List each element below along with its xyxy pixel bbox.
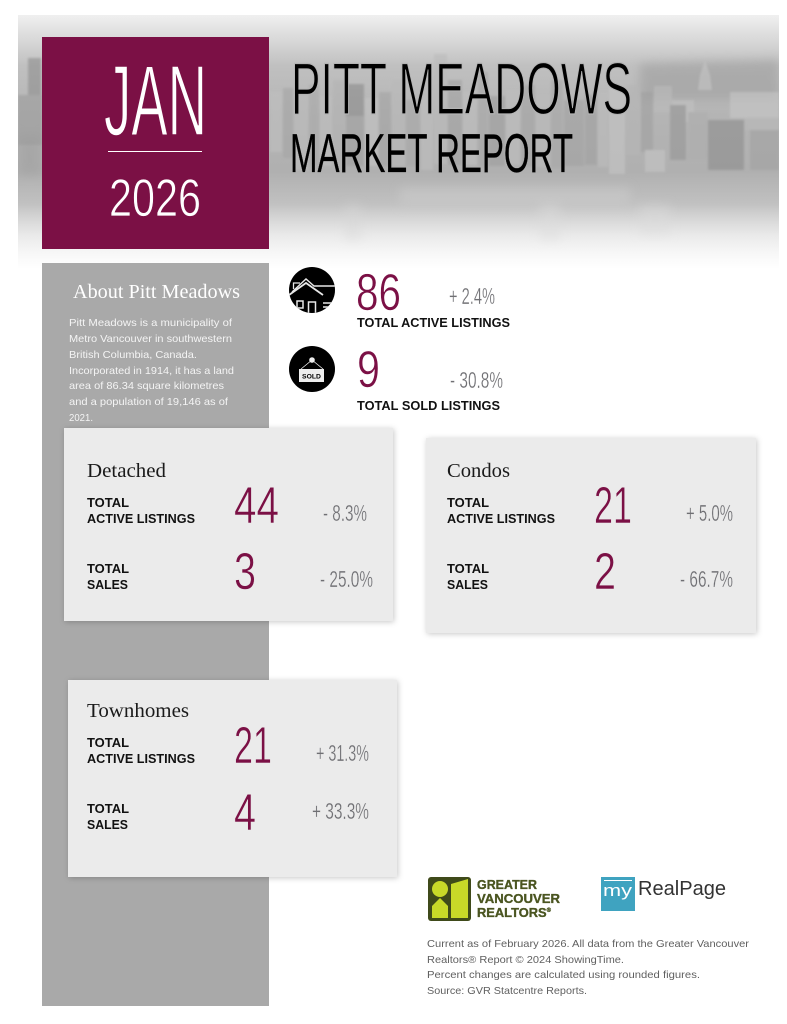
panel: condos: 2: [594, 543, 616, 601]
sidebar paragraph: 2021.: [69, 412, 93, 424]
sidebar paragraph: Pitt Meadows is a municipality of: [69, 317, 232, 329]
logo: myRealPage: RealPage: [638, 878, 726, 900]
sold listings stat: [357, 341, 503, 413]
sold listings stat: - 30.8%: [450, 367, 503, 393]
sold listings stat: 9: [357, 341, 380, 399]
sidebar paragraph: Incorporated in 1914, it has a land: [69, 365, 234, 377]
panel: detached: [64, 428, 393, 621]
panel: detached: - 25.0%: [320, 566, 373, 592]
panel: detached: 3: [234, 543, 256, 601]
panel: condos: ACTIVE LISTINGS: [447, 511, 555, 526]
icon: house: [289, 267, 336, 314]
panel: townhomes: 4: [234, 784, 256, 842]
panel: townhomes: + 31.3%: [316, 740, 369, 766]
panel: townhomes: + 33.3%: [312, 798, 369, 824]
panel: townhomes: ACTIVE LISTINGS: [87, 751, 195, 766]
panel: detached: ACTIVE LISTINGS: [87, 511, 195, 526]
year: 2026: [109, 169, 201, 228]
logo: Greater Vancouver Realtors: [428, 877, 561, 921]
title: MARKET REPORT: [290, 122, 573, 184]
footer note: Realtors® Report © 2024 ShowingTime.: [427, 954, 624, 966]
logo: Greater Vancouver Realtors: REALTORS: [477, 905, 547, 920]
title: [290, 49, 632, 184]
logo: myRealPage: my: [603, 881, 633, 900]
logo: myRealPage: [601, 877, 726, 911]
logo: Greater Vancouver Realtors: VANCOUVER: [477, 891, 561, 906]
panel: townhomes: TOTAL: [87, 735, 129, 750]
icon: sold sign: [289, 346, 335, 392]
month panel: [42, 37, 269, 249]
panel: townhomes: TOTAL: [87, 801, 129, 816]
panel: townhomes: SALES: [87, 817, 128, 832]
panel: detached: SALES: [87, 577, 128, 592]
active listings stat: + 2.4%: [449, 283, 495, 309]
panel: townhomes: 21: [234, 717, 272, 775]
active listings stat: [356, 264, 510, 330]
sidebar panel: [42, 263, 269, 1006]
sold listings stat: TOTAL SOLD LISTINGS: [357, 398, 500, 413]
panel: condos: SALES: [447, 577, 488, 592]
sidebar paragraph: British Columbia, Canada.: [69, 349, 197, 361]
logo: Greater Vancouver Realtors: ®: [547, 907, 552, 914]
panel: detached: Detached: [87, 460, 166, 482]
panel: condos: Condos: [447, 460, 510, 482]
icon: sold sign: SOLD: [302, 374, 321, 380]
panel: condos: 21: [594, 477, 632, 535]
panel: detached: TOTAL: [87, 495, 129, 510]
sidebar heading: About Pitt Meadows: [73, 281, 240, 303]
footer note: Source: GVR Statcentre Reports.: [427, 985, 587, 997]
panel: condos: TOTAL: [447, 561, 489, 576]
sidebar paragraph: area of 86.34 square kilometres: [69, 380, 224, 392]
panel: condos: - 66.7%: [680, 566, 733, 592]
header banner: city skyline photo: [18, 15, 779, 268]
sidebar paragraph: and a population of 19,146 as of: [69, 396, 228, 408]
month: JAN: [104, 45, 207, 157]
panel: condos: [426, 438, 756, 633]
sidebar paragraph: Metro Vancouver in southwestern: [69, 333, 232, 345]
sidebar paragraph: [69, 317, 234, 424]
footer note: Current as of February 2026. All data from the Greater Vancouver: [427, 938, 750, 950]
panel: detached: TOTAL: [87, 561, 129, 576]
panel: detached: 44: [234, 477, 279, 535]
panel: detached: - 8.3%: [323, 500, 367, 526]
footer note: Percent changes are calculated using rounded figures.: [427, 969, 700, 981]
panel: townhomes: [68, 680, 397, 877]
footer note: [427, 938, 750, 997]
logo: Greater Vancouver Realtors: GREATER: [477, 877, 538, 892]
panel: condos: TOTAL: [447, 495, 489, 510]
panel: condos: + 5.0%: [686, 500, 733, 526]
panel: townhomes: Townhomes: [87, 700, 189, 722]
active listings stat: TOTAL ACTIVE LISTINGS: [357, 315, 510, 330]
active listings stat: 86: [356, 264, 401, 322]
